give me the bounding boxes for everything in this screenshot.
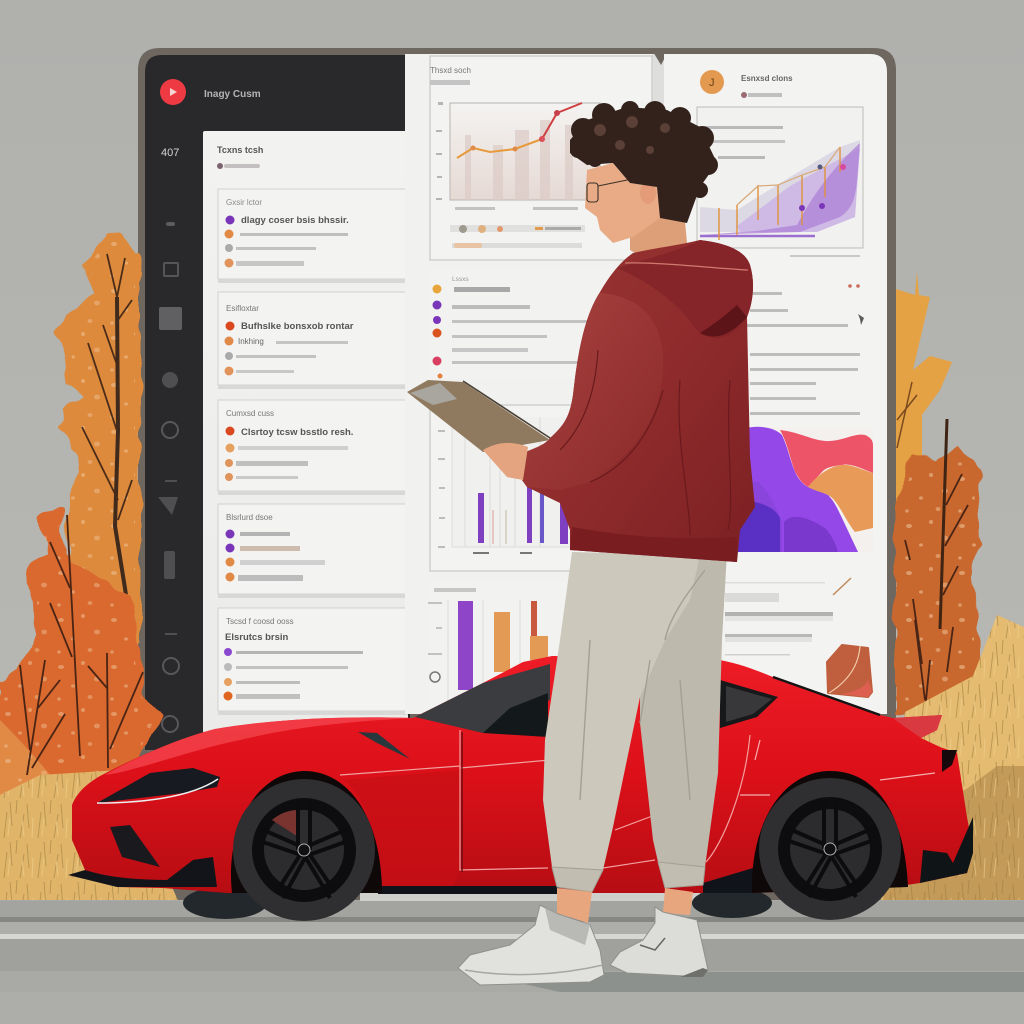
card 5 [218, 608, 408, 715]
road [0, 893, 1024, 1024]
hood [617, 240, 753, 338]
panel heading: Tcxns tcsh [217, 145, 263, 155]
tail light [942, 750, 957, 772]
hood vent [358, 732, 410, 759]
lower red-orange tree [0, 511, 160, 800]
lower bar chart [428, 580, 726, 720]
card 5: Elsrutcs brsin [225, 632, 289, 643]
front grille [110, 825, 160, 867]
icon: leaf [827, 645, 872, 697]
list card [430, 268, 652, 378]
car body [72, 656, 973, 893]
icon: pencil [833, 578, 851, 595]
trouser folds [580, 570, 705, 800]
card 2: Esifloxtar [226, 304, 259, 313]
sidebar number: 407 [161, 147, 179, 159]
card 2: Inkhing [238, 337, 264, 346]
card 3 [218, 400, 408, 495]
neck [630, 200, 687, 262]
panel sub-heading [217, 163, 260, 169]
user badge: Esnxsd clons [741, 74, 793, 83]
far side tyres [183, 887, 772, 919]
list card: Lssxs [452, 276, 469, 283]
hoodie hem [570, 527, 737, 562]
door and crease lines [340, 730, 750, 870]
dark sidebar [145, 55, 410, 750]
card 2: Bufhslke bonsxob rontar [241, 321, 354, 332]
left white panel [203, 131, 408, 733]
upper orange tree [58, 235, 138, 640]
person [407, 101, 755, 985]
right dashboard background panel [405, 50, 887, 714]
hoodie folds [560, 350, 731, 535]
line series [457, 103, 582, 158]
chart card: purple area [697, 107, 863, 257]
dark orange tree [897, 419, 980, 713]
rear wheel [759, 778, 901, 920]
user badge [700, 70, 793, 98]
sidebar icons [158, 222, 182, 732]
roof rear edge [773, 677, 880, 715]
card 2 [218, 292, 408, 389]
face [585, 163, 660, 243]
card 4 [218, 504, 408, 598]
sneaker right [610, 907, 708, 977]
wheel arches [231, 771, 908, 893]
card 3: Clsrtoy tcsw bsstlo resh. [241, 427, 353, 438]
hand [483, 443, 528, 480]
dashboard tablet [138, 48, 896, 905]
card 1: Gxsir lctor [226, 198, 262, 207]
dry grass [0, 615, 1024, 905]
rear spoiler [893, 715, 942, 738]
rear quarter window [720, 680, 778, 728]
front wheel [233, 779, 375, 921]
clipboard [407, 380, 550, 452]
sports car [68, 656, 973, 921]
sneaker left [458, 905, 604, 985]
user badge: J [709, 77, 714, 89]
hoodie body [522, 240, 755, 562]
chart legend [450, 225, 585, 248]
bar chart [430, 405, 600, 571]
lower right text and icons [725, 578, 872, 697]
colourful area chart [735, 427, 873, 552]
hoodie sleeve [522, 293, 663, 490]
near leg [543, 552, 700, 870]
logo icon [160, 79, 186, 105]
card 5: Tscsd f coosd ooss [226, 617, 294, 626]
glasses [587, 179, 632, 202]
ankles [557, 888, 693, 923]
fender shading [345, 770, 460, 893]
card 1 [218, 189, 408, 283]
card 1: dlagy coser bsis bhssir. [241, 215, 349, 226]
chart card: line chart: Thsxd soch [430, 66, 471, 75]
ear [640, 182, 656, 204]
headlight [97, 768, 220, 803]
far leg [620, 552, 727, 867]
windshield and side window [415, 664, 550, 737]
right autumn trees [896, 272, 980, 713]
cuffs [552, 862, 705, 892]
front splitter [68, 857, 217, 887]
card 3: Cumxsd cuss [226, 409, 274, 418]
left autumn trees [0, 235, 160, 800]
hood highlight [105, 717, 413, 775]
rear bumper [920, 817, 973, 883]
card 4: Blsrlurd dsoe [226, 513, 273, 522]
right text lines [745, 284, 864, 415]
trousers [543, 552, 727, 892]
app title: Inagy Cusm [204, 89, 261, 100]
hair [570, 101, 718, 223]
chart card: line chart [430, 56, 652, 260]
light orange tree [896, 272, 952, 505]
lower sill [378, 868, 753, 894]
